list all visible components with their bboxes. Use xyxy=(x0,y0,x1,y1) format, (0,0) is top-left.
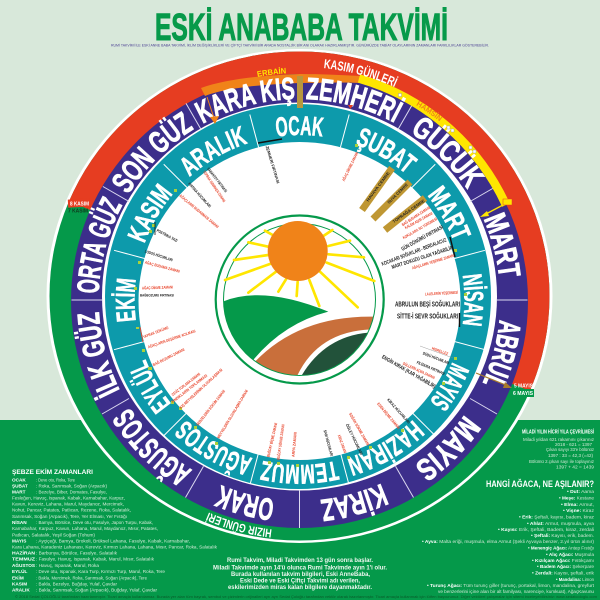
inner labels: winter and autumn side: FIRTINA HÜCUMLARI xyxy=(187,181,212,208)
panel: grafting guide: • Menengiç Ağacı: Antep Fıstığı xyxy=(528,546,594,550)
month labels on teal ring: NİSAN xyxy=(462,274,488,326)
inner labels: may and summer side: ÖĞLEY HÜCUMLARI xyxy=(345,423,364,456)
inner labels: spring side: LALELERİN YEŞERMESİ xyxy=(425,290,458,296)
title: ESKİ ANABABA TAKVİMİ xyxy=(155,7,448,49)
panel: grafting guide xyxy=(422,478,595,594)
panel: vegetable planting times: Patlıcan, Salatalık, Yeşil Soğan (Tohum) xyxy=(12,532,95,537)
old season labels on purple ring: MAYIS xyxy=(416,415,482,480)
panel: grafting guide: • Kayısı: Erik, Şeftali, Badem, kiraz, zerdali xyxy=(498,527,594,532)
inner labels: late summer side: FINDIKLARIN TOPLANMASI xyxy=(170,373,208,404)
old season labels on purple ring xyxy=(74,77,521,522)
inner labels: may and summer side: KİRAZ ZAMANI xyxy=(337,434,348,454)
inner labels: spring side: KOCAKARI SOĞUKLARI - BERDALACUZ xyxy=(380,235,448,268)
panel: gregorian to hijri conversion: Miladi yıldan 621 rakamını çıkarınız xyxy=(523,437,595,442)
month labels on teal ring: HAZİRAN xyxy=(348,420,425,476)
month labels on teal ring: TEMMUZ xyxy=(260,460,340,484)
inner labels: may and summer side: FİLİZKIRA FIRTINASI xyxy=(416,360,446,376)
panel: vegetable planting times: EYLÜL xyxy=(12,568,28,574)
old season labels on purple ring: ORTA GÜZ xyxy=(76,196,123,293)
band label: erbain: ERBAİN xyxy=(257,67,286,77)
panel: vegetable planting times: AĞUSTOS xyxy=(12,561,35,568)
inner labels: spring side: AĞAÇLARIN YEŞERME ZAMANI xyxy=(411,253,455,270)
cemre bars: HAVAYA CEMRE xyxy=(365,170,391,203)
month labels on teal ring: OCAK xyxy=(276,116,324,137)
center note: rumi calendar: Miladi Takvimde ayın 14'ü olunca Rumi Takvimde ayın 1'i olur. xyxy=(213,564,387,571)
month labels on teal ring: ARALIK xyxy=(181,126,248,177)
center note: rumi calendar: Eski Dede ve Eski Çiftçi Takvimi adı verilen, xyxy=(240,578,360,585)
panel: grafting guide: • Ahlat: Armut, muşmula, ayva xyxy=(527,521,594,526)
inner labels: late summer side: BUĞDAY SÖKME ZAMANI xyxy=(276,424,285,460)
panel: vegetable planting times: Fesleğen, Havuç, Ispanak, Kabak, Karnabahar, Karpuz, xyxy=(12,496,125,501)
panel: vegetable planting times: TEMMUZ xyxy=(12,557,35,562)
teal ring xyxy=(105,104,491,489)
panel: gregorian to hijri conversion: 1397 : 33 = 42,3 (=42) xyxy=(548,453,593,458)
inner labels: may and summer side: KİRAZ HÜCUMLARI xyxy=(386,397,411,424)
subtitle: RUMİ TAKVİMİ İLE ESKİ ANNE BABA TAKVİMİ, İKLİM DEĞİŞİKLİKLERİ VE ÇİFTÇİ TAKVİMİ BİR ARADA NOSTALJİK BİR ANI OLARAK HAZIRLANMIŞTIR. GÜNÜMÜZDE TABİAT OLAYLARININ ZAMANLARI FARKLILIKLAR GÖSTEREBİLİR. xyxy=(111,43,489,48)
panel: vegetable planting times: : Barbunya, Börülce, Fasulye, Salatalık xyxy=(36,551,118,556)
inner labels: spring side xyxy=(341,151,460,327)
month labels on teal ring: MART xyxy=(428,184,472,238)
inner labels: spring side: KOKULARA SU YÜRÜMESİ xyxy=(402,216,438,240)
date tag: 8 kasım: 8 KASIM xyxy=(70,202,89,208)
month labels on teal ring: AĞUSTOS xyxy=(175,422,253,476)
logo landscape xyxy=(224,295,373,375)
month labels on teal ring: MAYIS xyxy=(431,362,470,411)
panel: grafting guide: • Alıç Ağacı: Muşmula xyxy=(546,552,594,557)
panel: vegetable planting times: HAZİRAN xyxy=(12,550,36,556)
marker: zemheri red triangle xyxy=(348,105,353,109)
panel: vegetable planting times: : Bakla, Sarımsak, Soğan (Arpacık), Buğday, Yulaf, Çavdar xyxy=(36,588,157,593)
inner labels: late summer side: KIŞ MEYVELERİNİN OLGUNLAŞMASI xyxy=(178,367,223,410)
panel: vegetable planting times: MAYIS xyxy=(12,538,26,543)
inner labels: spring side: SİTTE-İ SEVR SOĞUKLARI xyxy=(397,312,458,320)
center note: rumi calendar: Burada kullanılan takvim bilgileri, Eski AnneBaba, xyxy=(231,571,370,578)
panel: vegetable planting times: ŞUBAT xyxy=(12,483,28,488)
panel: vegetable planting times: ŞEBZE EKİM ZAMANLARI xyxy=(12,469,93,476)
panel: grafting guide: ve benzerlerini içine alan bir alt familyası, narenciye, kumkuat), AğaçKavunu xyxy=(438,589,594,594)
old season labels on purple ring: SON GÜZ xyxy=(112,111,194,192)
arrow: brown may marker xyxy=(476,373,512,388)
purple ring xyxy=(71,74,528,528)
cemre bars: SUYA CEMRE xyxy=(386,182,409,205)
panel: vegetable planting times: MART xyxy=(12,490,26,495)
panel: vegetable planting times: : Deve otu, Roka, Tere xyxy=(36,477,75,482)
panel: vegetable planting times: : Deve otu, Ispanak, Kara Turp, Kırmızı Turp, Marul, Roka, Tere xyxy=(36,569,165,574)
inner labels: winter and autumn side: SABANTOY FIRTINASI xyxy=(206,166,228,193)
inner labels: may and summer side: GÜLLERİN AÇMA ZAMANI xyxy=(402,361,436,380)
panel: grafting guide: • Kızılçam Ağacı: Fıstıkçamı xyxy=(532,558,594,563)
old season labels on purple ring: ORAK xyxy=(213,484,273,520)
markers: white squares on hamsin xyxy=(398,94,476,153)
panel: vegetable planting times: : Bezelye, Biber, Domates, Fasulye, xyxy=(36,490,107,495)
panel: grafting guide: • Mandalina: Limon xyxy=(556,577,594,582)
lime day markers xyxy=(134,144,467,467)
panel: vegetable planting times: OCAK xyxy=(12,477,26,482)
panel: vegetable planting times: Karnabahar, Karpuz, Kavun, Lahana, Marul, Maydanoz, Mısır, Patates, xyxy=(12,526,158,531)
panel: grafting guide: • Dut: Aama xyxy=(567,489,594,494)
panel: vegetable planting times: Kavun, Kereviz, Lahana, Marul, Maydanoz, Mercimek, xyxy=(12,502,124,507)
outer season band xyxy=(46,49,552,543)
inner labels: spring side: AĞAÇ DİKME ZAMANI xyxy=(341,151,359,182)
old season labels on purple ring: MART xyxy=(484,212,521,276)
inner labels: winter and autumn side: ZEMHERİ FIRTINASI xyxy=(265,145,281,184)
panel: vegetable planting times: : Bamya, Börülce, Deve otu, Fasulye, Japon Turpu, Kabak, xyxy=(36,520,153,525)
old season labels on purple ring: ABRUL xyxy=(482,320,521,384)
logo sun xyxy=(268,221,328,281)
inner labels: may and summer side: SAM HÜCUMLARI xyxy=(323,429,334,457)
inner labels: may and summer side: SOĞAN SÖKME ZAMANI xyxy=(348,412,371,446)
inner labels: spring side: KALEM AŞISI ZAMANI xyxy=(404,211,433,230)
center note: rumi calendar: Rumi Takvim, Miladi Takvimden 13 gün sonra başlar. xyxy=(227,557,373,564)
inner labels: late summer side: CEVİZ TOPLAMA ZAMANI xyxy=(170,371,201,397)
erbain orange strip xyxy=(201,74,360,96)
month labels on teal ring xyxy=(111,116,488,484)
hamsin yellow strip xyxy=(359,78,506,205)
logo sun rays xyxy=(225,230,374,307)
panel: vegetable planting times: : Bakla, Mercimek, Roka, Sarımsak, Soğan (Arpacık), Tere xyxy=(36,575,147,580)
old season labels on purple ring: İLK GÜZ xyxy=(74,312,120,401)
inner labels: late summer side: AĞAÇLARIN DÜŞÜRME ACILMASI xyxy=(147,328,196,349)
panel: vegetable planting times: KASIM xyxy=(12,581,27,586)
inner labels: late summer side: SEBZELERİN SÖKÜM ZAMANI xyxy=(195,389,226,427)
panel: grafting guide: • Meşe: Kestane xyxy=(559,496,594,500)
inner labels: late summer side: BAĞ BOZUMU ZAMANI xyxy=(152,347,185,367)
inner labels: late summer side: MEYVELERİN OLGUNLAŞMA ZAMANI xyxy=(216,389,249,439)
inner labels: may and summer side: ENGİN KIRAK (KAR YAĞABİLİR) xyxy=(380,353,437,390)
date tag: 6 mayıs xyxy=(511,389,534,397)
panel: vegetable planting times: : Bakla, Bezelye, Buğday, Yulaf, Çavdar xyxy=(36,581,117,586)
panel: vegetable planting times: Nohut, Pancar, Patates, Patlıcan, Rezene, Roka, Salatalık, xyxy=(12,508,131,513)
inner labels: may and summer side xyxy=(323,346,453,457)
inner labels: may and summer side: HIDRELLEZ xyxy=(431,346,449,356)
panel: gregorian to hijri conversion: Çıkan sayıyı 33'e bölünüz xyxy=(546,447,595,452)
inner labels: spring side: ABRULUN BEŞİ SOĞUKLARI xyxy=(395,300,460,308)
date tag: 5 mayıs: 5 MAYIS xyxy=(514,384,534,390)
panel: grafting guide: • Turunç Ağacı: Tüm turunç giller (turunç, portakal, limon, mandalina, greyfurt xyxy=(427,583,595,588)
panel: gregorian to hijri conversion xyxy=(522,429,595,470)
inner labels: winter and autumn side: BAĞBOZUMU FIRTINASI xyxy=(140,292,174,298)
panel: vegetable planting times: NİSAN xyxy=(12,519,27,525)
central logo xyxy=(216,216,384,384)
inner labels: winter and autumn side: AĞAÇ DİKME ZAMANI xyxy=(142,284,173,290)
panel: vegetable planting times xyxy=(12,469,218,593)
inner labels: winter and autumn side: AĞAÇ BUDAMA ZAMANI xyxy=(144,260,180,274)
cemre bars: TOPRAĞA CEMRE xyxy=(392,198,426,224)
old season labels on purple ring: KARA KIŞ xyxy=(194,77,294,124)
inner labels: may and summer side: DÜDÜ HÜCUMLARI xyxy=(422,351,450,365)
panel: grafting guide: • Badem Ağacı: Şekerpare xyxy=(537,564,594,569)
date tag: 8 kasım xyxy=(68,198,90,208)
calendar wheel xyxy=(46,49,552,543)
month labels on teal ring: KASIM xyxy=(127,182,173,243)
arrow: erbain start xyxy=(207,97,219,124)
arrow: hamsin end xyxy=(480,199,512,217)
cemre bars xyxy=(362,168,426,230)
inner labels: late summer side: BUĞDAY BİÇME ZAMANI xyxy=(266,422,278,458)
panel: gregorian to hijri conversion: 2018 - 621 = 1397 xyxy=(555,442,592,447)
inner labels: spring side: GÜN DÖNÜMÜ FIRTINASI xyxy=(400,224,445,253)
old season labels on purple ring: GÜCÜK xyxy=(414,118,486,190)
old season labels on purple ring: KİRAZ xyxy=(320,484,389,522)
panel: vegetable planting times: ARALIK xyxy=(12,588,30,593)
month labels on teal ring: EYLÜL xyxy=(130,359,171,415)
panel: grafting guide: • Zerdali: Kayısı, şeftali, erik xyxy=(532,570,595,576)
band label: kasım günleri: KASIM GÜNLERİ xyxy=(324,59,399,87)
inner labels: may and summer side: ESEN BİÇME ZAMANI xyxy=(376,401,401,430)
inner labels: winter and autumn side: POSTİNNA YAZI xyxy=(156,228,178,243)
inner labels: late summer side: ARPA ZAMANI xyxy=(291,432,298,457)
inner labels: winter and autumn side: AĞAÇLARIN BUDANMASI ZAMANI xyxy=(178,193,220,229)
panel: grafting guide: • Şeftali: Kayısı, erik, badem. xyxy=(531,533,594,538)
inner labels: late summer side: YAPRAK DÖKÜMÜ xyxy=(142,325,169,339)
panel: gregorian to hijri conversion: 1397 + 42 = 1439 xyxy=(556,464,594,470)
inner labels: winter and autumn side xyxy=(140,139,282,298)
panel: grafting guide: • Elma: Armut, xyxy=(561,502,594,507)
inner labels: winter and autumn side: LODOS HÜCUMLARI xyxy=(144,249,173,262)
date tag: 6 mayıs: 6 MAYIS xyxy=(513,391,534,397)
band label: hamsin: HAMSİN xyxy=(416,101,442,121)
center note: rumi calendar: eskilerimizden miras kalan bilgilere dayanmaktadır. xyxy=(228,584,372,591)
panel: vegetable planting times: : Havuç, Ispanak, Marul, Roka xyxy=(36,563,99,568)
panel: grafting guide: • Vişne: Kiraz xyxy=(563,508,595,513)
panel: vegetable planting times: EKİM xyxy=(12,574,24,580)
gold marker strip at year start xyxy=(297,76,303,108)
band label: hızır günleri: HIZIR GÜNLERİ xyxy=(205,512,272,538)
panel: vegetable planting times: : Fasulye, Havuç, Ispanak, Kabak, Marul, Mısır, Salatalık xyxy=(36,557,155,562)
old season labels on purple ring: ZEMHERİ xyxy=(306,77,406,123)
inner labels: spring side: MART DOKUZU OLAN YAĞABİLİR xyxy=(390,243,454,271)
panel: vegetable planting times: : Roka, Sarımsak, Soğan (Arpacık) xyxy=(36,483,107,488)
month labels on teal ring: ŞUBAT xyxy=(356,128,418,172)
panel: vegetable planting times: : Ayçiçeği, Bamya, Brokoli, Brüksel Lahana, Fasulye, Kabak, Karnabahar, xyxy=(36,538,190,543)
old season labels on purple ring: AĞUSTOS xyxy=(113,409,192,486)
footer credit: © 2018 Sedat ÇOLOĞLU tarafından hazırlanmıştır. Ticari amaçla kullanılamaz. Burada yer alan tüm bayrak, sembol ve çizimlerin orijinalleri ayrı ayrı Sedat Çoloğlu tarafından vektör olarak hazırlanmıştır. Ticari amaçla kullanmak için lütfen başvurunuz. Diğer vektörel çalışmalar için sitemi inceleyebilirsiniz: www.sedatcologlu.com xyxy=(15,594,597,599)
month labels on teal ring: EKİM xyxy=(111,278,136,322)
panel: vegetable planting times: Sarımsak, Soğan (Arpacık), Tere, Yer Elması, Yer Fıstığı xyxy=(12,514,127,519)
panel: vegetable planting times: Kara Lahana, Karadeniz Lahanası, Kereviz, Kırmızı Lahana, Lahana, Mısır, Pancar, Roka, Salatalık xyxy=(12,544,218,549)
panel: grafting guide: • Ayva: Malta eriği, muşmula, elma Armut (Şekli Ayvaya benzer, 2.yıl ürün alınır) xyxy=(422,539,594,544)
center note: rumi calendar xyxy=(213,557,387,591)
inner labels: winter and autumn side: TOPRAK ISINIRKEN ZAMANI xyxy=(202,170,227,203)
date tag: 7 kasım: 7 KASIM xyxy=(68,208,88,214)
inner labels: late summer side xyxy=(140,325,298,460)
panel: grafting guide: • Erik: Şeftali, kayısı, badem, kiraz xyxy=(519,514,595,520)
panel: gregorian to hijri conversion: Bölümü 2.çıkan sayı ile toplayınız xyxy=(529,459,595,464)
inner labels: spring side: BAĞ BUDAMA ZAMANI xyxy=(401,205,431,227)
